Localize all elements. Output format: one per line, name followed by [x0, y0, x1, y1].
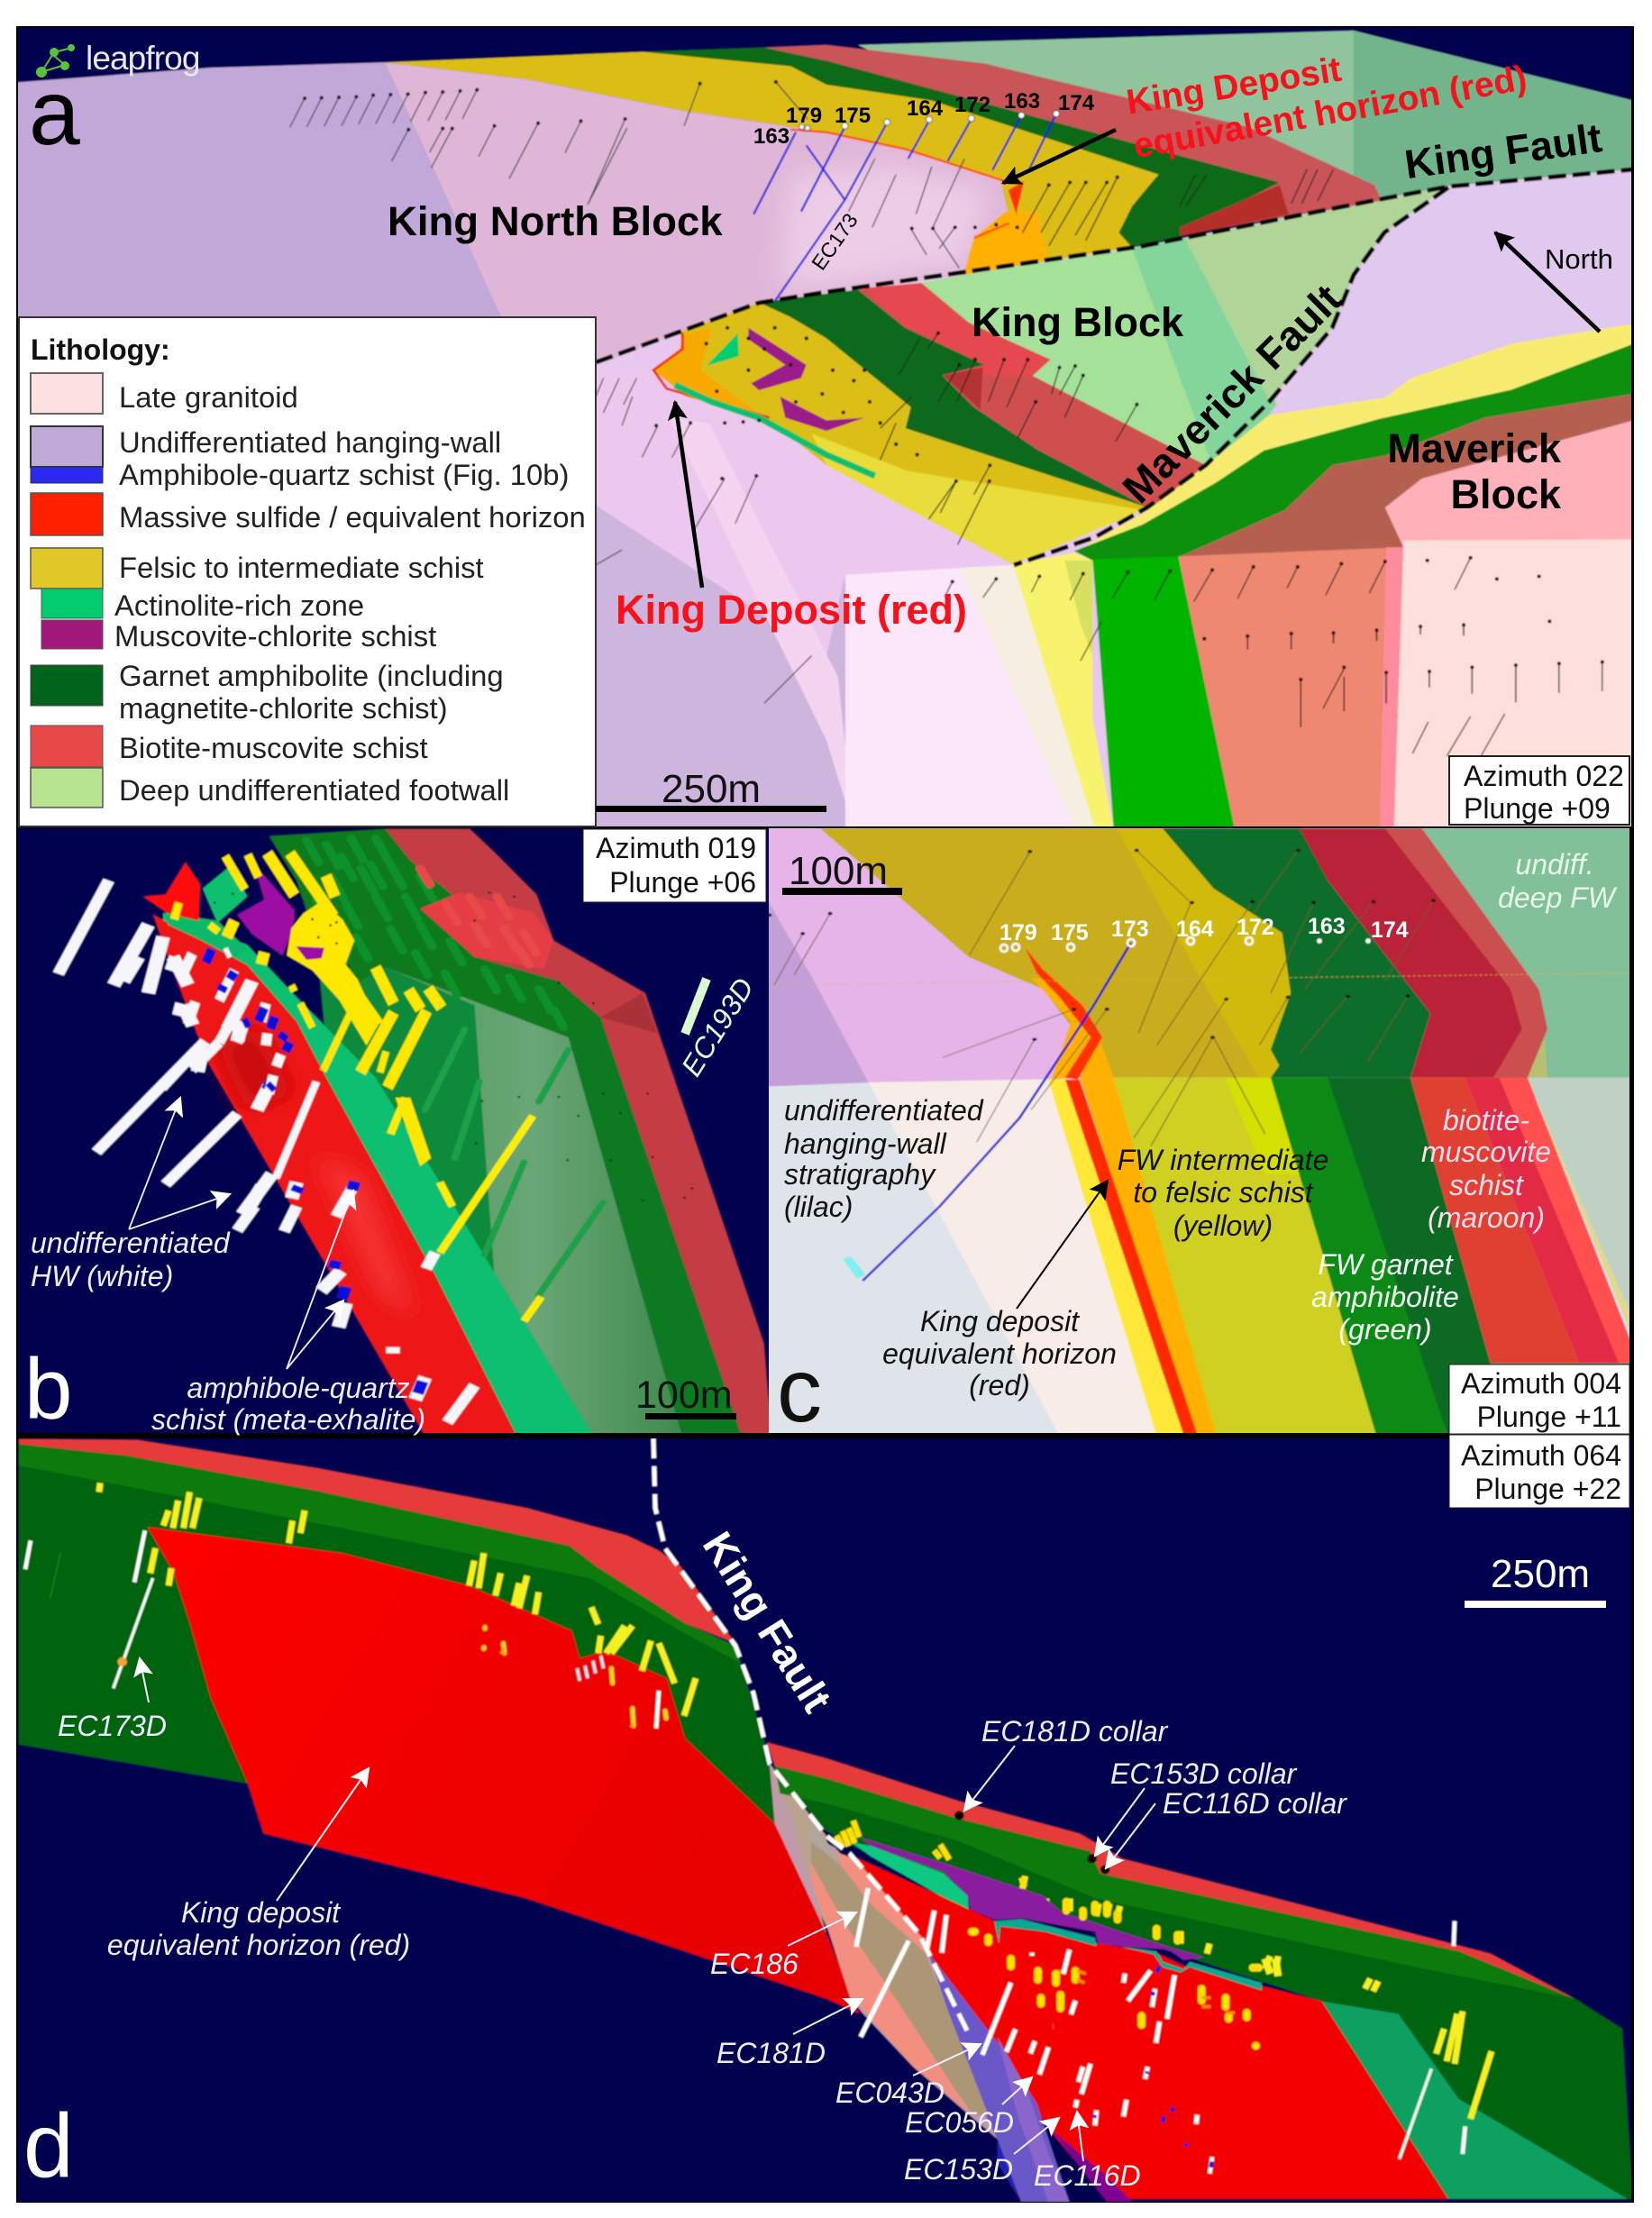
scale bar d: 250m	[1491, 1552, 1590, 1596]
label: Maverick Block	[1387, 425, 1562, 517]
swatch: garnet amphibolite	[31, 665, 103, 706]
label: EC173: EC173	[807, 209, 863, 274]
panel d	[16, 1433, 1639, 2218]
legend labels: Late granitoid	[119, 380, 298, 414]
swatch: biotite-muscovite schist	[31, 726, 103, 767]
Maverick Fault dashed line	[1014, 187, 1448, 565]
arrow: to equivalent horizon c	[1017, 1181, 1108, 1309]
labels panel d: EC181D collar	[981, 1715, 1169, 1748]
label: FW intermediate to felsic schist: to felsic schist	[1133, 1176, 1314, 1209]
model surfaces of panel d	[16, 1433, 1639, 2218]
label: Maverick Block: Maverick	[1387, 425, 1562, 471]
drill hole numbers panel c: 163	[1308, 914, 1346, 939]
drill hole numbers panel c: 175	[1051, 920, 1089, 945]
legend labels: Undifferentiated hanging-wall	[119, 425, 501, 459]
legend labels: Deep undifferentiated footwall	[119, 773, 509, 807]
label: undiff. deep FW: deep FW	[1498, 881, 1618, 914]
collar markers panel c	[1000, 937, 1370, 952]
legend labels: Actinolite-rich zone	[114, 589, 364, 622]
yellow drill intervals d	[99, 1483, 1492, 2119]
labels panel d: King deposit	[181, 1896, 341, 1929]
drill hole numbers panel a: 163	[753, 124, 789, 149]
arrow: to King Deposit	[675, 402, 702, 588]
drill hole numbers panel a: 174	[1058, 91, 1095, 115]
drill hole numbers panel a	[753, 89, 1095, 149]
drill hole numbers panel c: 174	[1371, 917, 1409, 943]
label: undifferentiated hanging-wall stratigraphy: undifferentiated	[784, 1094, 984, 1127]
label: King deposit equivalent horizon: equivalent horizon	[882, 1337, 1117, 1370]
orientation box b: Plunge +06	[609, 866, 756, 899]
scale bar a: 250m	[662, 767, 761, 811]
label: undifferentiated hanging-wall stratigraphy: (lilac)	[784, 1191, 853, 1223]
arrows panel b	[129, 1098, 353, 1369]
drill hole numbers panel a: 164	[907, 96, 944, 121]
white drill intervals	[59, 881, 475, 1422]
labels panel d: EC116D	[1034, 2159, 1141, 2192]
legend labels: Amphibole-quartz schist (Fig. 10b)	[119, 458, 569, 491]
labels panel d: EC181D	[716, 2037, 826, 2069]
King Fault dashed line	[596, 169, 1633, 362]
scale bar d	[1465, 1552, 1606, 1608]
drill hole numbers panel a: 172	[954, 93, 990, 117]
label: King Deposit equivalent horizon: equivalent horizon (red)	[1130, 59, 1529, 166]
green drill intervals	[302, 838, 563, 1027]
model surfaces of panel a	[16, 26, 1639, 830]
orientation box c: Azimuth 004	[1461, 1367, 1621, 1400]
legend labels: magnetite-chlorite schist)	[119, 691, 448, 725]
drill label EC193D: EC193D	[675, 972, 760, 1082]
drill hole numbers panel a: 163	[1004, 89, 1040, 114]
label: King Deposit (red): King Deposit (red)	[616, 587, 967, 633]
north arrow	[1495, 233, 1613, 332]
model surfaces of panel b	[14, 826, 776, 1442]
label: FW garnet amphibolite: amphibolite	[1311, 1281, 1459, 1313]
label: undifferentiated HW	[31, 1227, 231, 1292]
swatch: deep footwall	[31, 768, 103, 808]
labels panel d: EC153D collar	[1110, 1757, 1298, 1790]
callout arrows panel d	[140, 1658, 1155, 2161]
yellow drill intervals	[390, 1098, 542, 1321]
label: Maverick Fault: Maverick Fault	[1113, 275, 1350, 512]
label: biotite-muscovite schist: biotite-	[1443, 1104, 1529, 1136]
label: biotite-muscovite schist: muscovite	[1421, 1136, 1551, 1168]
orientation box c	[1449, 1365, 1629, 1434]
labels panel d: EC153D	[904, 2153, 1013, 2186]
labels panel d: EC173D	[58, 1710, 167, 1742]
small drill intervals	[836, 1821, 1025, 1886]
orientation box a	[1449, 756, 1629, 825]
logo icon	[37, 45, 74, 77]
label: undifferentiated hanging-wall stratigraphy: stratigraphy	[784, 1158, 936, 1191]
logo: leapfrog	[37, 40, 200, 77]
label: King deposit equivalent horizon	[882, 1305, 1117, 1401]
orientation box c: Plunge +11	[1477, 1401, 1621, 1433]
orientation box b: Azimuth 019	[596, 832, 756, 864]
panel b	[14, 826, 776, 1442]
legend labels: Garnet amphibolite (including	[119, 659, 504, 692]
label: FW intermediate to felsic schist	[1118, 1144, 1328, 1242]
label: King Fault d: King Fault	[694, 1523, 841, 1721]
Maverick block	[1269, 169, 1634, 415]
legend labels: Felsic to intermediate schist	[119, 551, 484, 584]
label: amphibole-quartz schist	[151, 1372, 425, 1436]
label: FW intermediate to felsic schist: (yellow)	[1173, 1209, 1273, 1242]
label: King Deposit equivalent horizon: King Deposit	[1124, 50, 1344, 123]
logo wordmark: leapfrog	[86, 40, 200, 77]
scale bar b: 100m	[635, 1374, 733, 1417]
background frame	[16, 26, 1634, 1301]
labels panel d: EC056D	[905, 2106, 1014, 2139]
panel c	[765, 826, 1633, 1442]
frame lower	[16, 1301, 1634, 2203]
label: Maverick Block: Block	[1450, 471, 1562, 517]
drill hole numbers panel c: 179	[999, 920, 1037, 945]
panel letter d: d	[23, 2095, 74, 2196]
lower model	[596, 505, 845, 829]
drill hole numbers panel c	[999, 914, 1409, 945]
swatch: massive sulfide	[31, 493, 103, 535]
label: FW garnet amphibolite	[1311, 1248, 1459, 1346]
orientation box d	[1449, 1435, 1629, 1508]
legend box	[19, 317, 596, 826]
legend labels: Muscovite-chlorite schist	[114, 619, 436, 653]
legend labels: Massive sulfide / equivalent horizon	[119, 500, 586, 534]
alteration bands	[859, 1837, 1205, 1960]
label: biotite-muscovite schist: (maroon)	[1428, 1201, 1545, 1234]
panel letter a: a	[29, 61, 80, 164]
orientation box a: Plunge +09	[1464, 792, 1611, 825]
panel a: King North, King and Maverick blocks	[16, 26, 1639, 830]
swatch: felsic schist	[31, 548, 103, 589]
labels panel d: EC043D	[835, 2077, 945, 2109]
drill hole numbers panel a: 179	[786, 104, 822, 128]
label: amphibole-quartz schist: amphibole-quartz	[187, 1372, 410, 1404]
label: undifferentiated hanging-wall stratigraphy: hanging-wall	[784, 1127, 947, 1160]
swatch: muscovite-chlorite schist	[41, 620, 103, 649]
orientation box a: Azimuth 022	[1464, 760, 1624, 792]
labels panel d: EC116D collar	[1163, 1787, 1347, 1820]
right side surfaces	[775, 1766, 1633, 2199]
label: King deposit equivalent horizon: (red)	[969, 1369, 1030, 1401]
heading: King North Block: King North Block	[388, 198, 723, 244]
swatch: actinolite zone	[41, 589, 103, 618]
labels panel d: EC186	[710, 1948, 799, 1980]
scale bar c: 100m	[789, 849, 888, 893]
swatch: hanging wall	[31, 426, 103, 467]
legend title: Lithology:	[31, 333, 170, 366]
swatch: late granitoid	[31, 373, 103, 414]
label: King Block: King Block	[972, 299, 1184, 345]
labels panel d: equivalent horizon (red)	[107, 1929, 410, 1961]
drill hole numbers panel a: 175	[835, 104, 871, 128]
panel letter c: c	[777, 1340, 822, 1441]
label: biotite-muscovite schist: schist	[1449, 1169, 1524, 1201]
label: FW intermediate to felsic schist: FW intermediate	[1118, 1144, 1328, 1176]
drill hole numbers panel c: 164	[1176, 917, 1214, 942]
label: undiff. deep FW	[1498, 848, 1618, 914]
scale bar a	[596, 767, 826, 812]
label: undifferentiated HW: undifferentiated	[31, 1227, 231, 1259]
label: King deposit equivalent horizon: King deposit	[920, 1305, 1080, 1337]
drill holes panel a	[290, 82, 964, 703]
drill hole numbers panel c: 173	[1111, 917, 1149, 942]
label: biotite-muscovite schist	[1421, 1104, 1551, 1234]
label: undifferentiated hanging-wall stratigraphy	[784, 1094, 984, 1223]
middle King block	[921, 187, 1448, 510]
label: undiff. deep FW: undiff.	[1515, 848, 1594, 881]
north arrow: North	[1545, 243, 1613, 275]
orientation box b	[583, 829, 766, 902]
label: undifferentiated HW: HW (white)	[31, 1260, 173, 1292]
drill hole numbers panel c: 172	[1237, 915, 1274, 940]
label: FW garnet amphibolite: FW garnet	[1318, 1248, 1454, 1281]
fault wedge and details	[811, 1821, 1262, 2202]
labels panel d	[58, 1710, 1347, 2192]
panel letter b: b	[24, 1341, 72, 1438]
legend labels	[114, 380, 586, 807]
label: amphibole-quartz schist: schist (meta-exhalite)	[151, 1403, 425, 1436]
orientation box d: Azimuth 064	[1461, 1439, 1621, 1472]
label: FW garnet amphibolite: (green)	[1338, 1313, 1432, 1346]
swatch: amphibole-quartz schist	[31, 467, 103, 483]
legend labels: Biotite-muscovite schist	[119, 731, 428, 764]
King Fault dashed line d	[653, 1438, 967, 2031]
blue drill traces	[753, 114, 1056, 301]
label: King Fault: King Fault	[1401, 114, 1604, 187]
arrow: to equivalent horizon	[1003, 130, 1116, 183]
model surfaces of panel c	[765, 826, 1633, 1442]
orientation box d: Plunge +22	[1474, 1473, 1621, 1505]
drill cluster detail panel b	[162, 853, 442, 1093]
